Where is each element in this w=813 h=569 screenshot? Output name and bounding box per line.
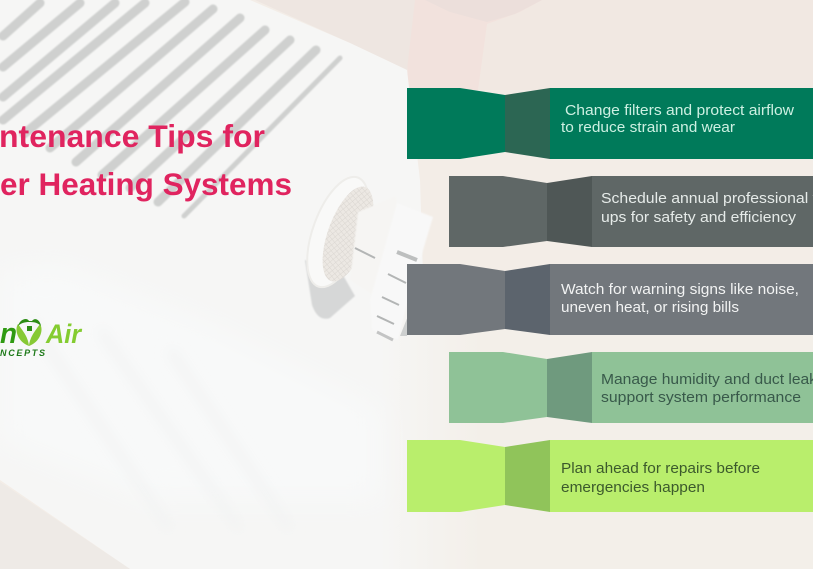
logo: n bbox=[0, 318, 17, 350]
step 4: humidity and duct leaks bbox=[449, 352, 813, 423]
icon: leaf heart with house bbox=[16, 319, 42, 346]
step 3: warning signs bbox=[407, 264, 813, 335]
step 1: change filters bbox=[407, 88, 813, 159]
title bbox=[0, 118, 292, 202]
title: ntenance Tips for bbox=[0, 118, 265, 154]
step 3: warning signs: Watch for warning signs like noise, bbox=[561, 281, 799, 298]
step 1: change filters: Change filters and protect airflow bbox=[565, 102, 794, 119]
step 4: humidity and duct leaks: support system performance bbox=[601, 389, 801, 406]
step 5: plan ahead: emergencies happen bbox=[561, 479, 705, 496]
step 4: humidity and duct leaks: Manage humidity and duct leak bbox=[601, 371, 813, 388]
step 5: plan ahead: Plan ahead for repairs before bbox=[561, 460, 760, 477]
thermostat valve bbox=[295, 169, 433, 340]
step 2: annual tune-ups bbox=[449, 176, 813, 247]
radiator vent slots bbox=[3, 2, 340, 216]
logo: Air bbox=[45, 319, 82, 349]
step 3: warning signs: uneven heat, or rising bills bbox=[561, 299, 739, 316]
step 5: plan ahead bbox=[407, 440, 813, 512]
logo: NCEPTS bbox=[0, 348, 45, 358]
step 2: annual tune-ups: Schedule annual professional t bbox=[601, 190, 813, 207]
logo bbox=[0, 318, 82, 358]
step 1: change filters: to reduce strain and wear bbox=[561, 119, 735, 136]
step 2: annual tune-ups: ups for safety and efficiency bbox=[601, 209, 796, 226]
title: er Heating Systems bbox=[0, 166, 292, 202]
